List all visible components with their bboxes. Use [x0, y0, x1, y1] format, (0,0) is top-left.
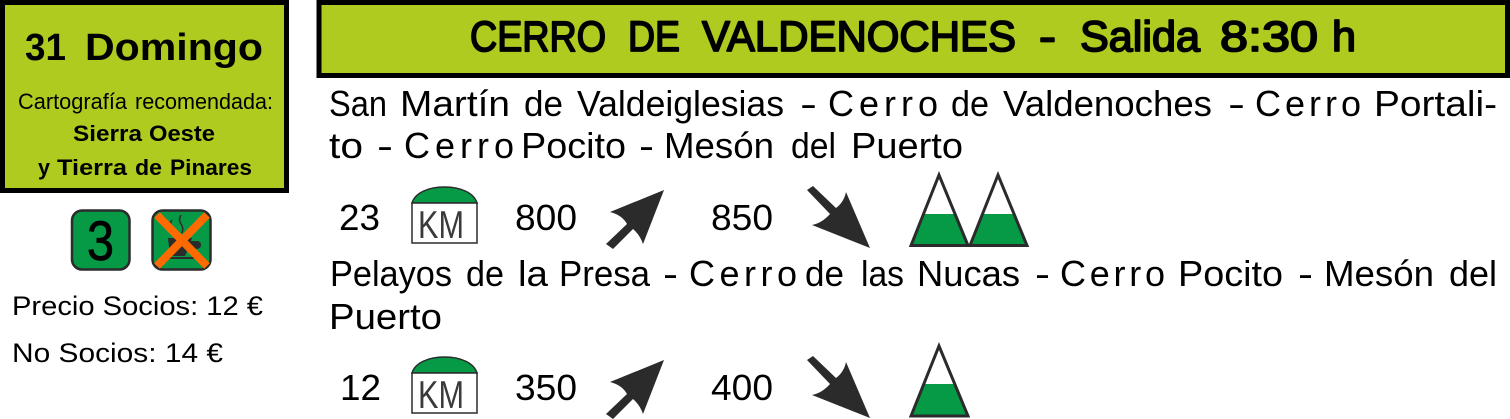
- text: descent: 850: [711, 197, 773, 238]
- text: route 2 line 1: Cerro: [1060, 253, 1165, 294]
- route 1 stats: [339, 175, 1027, 249]
- text: route 1 line 2: -: [377, 125, 393, 166]
- text: route 2 line 1: Pocito: [1178, 253, 1283, 294]
- icon: km marker: KM: [418, 204, 464, 247]
- text: map name line 2: Tierra: [57, 155, 128, 180]
- text: route 1 line 1: Cerro: [1255, 83, 1361, 124]
- text: map name line 2: Pinares: [170, 155, 252, 180]
- icon: descent arrow: [807, 356, 870, 418]
- panel: title banner: h: [1332, 13, 1356, 61]
- text: route 1 line 2: -: [639, 125, 654, 166]
- text: route 1 line 2: Puerto: [851, 125, 963, 166]
- text: route 2 line 1: -: [1298, 253, 1313, 294]
- text: map name line 2: y: [38, 155, 51, 180]
- text: route 1 line 1: Portali-: [1374, 83, 1497, 124]
- text: route 2 line 2: Puerto: [329, 296, 442, 337]
- text: member price: Precio Socios: 12 €: [12, 291, 263, 321]
- text: descent: 400: [711, 367, 773, 408]
- text: route 1 line 1: Martín: [400, 83, 510, 124]
- icon: km marker: [412, 187, 477, 247]
- text: route 1 line 1: Valdenoches: [1003, 83, 1212, 124]
- text: route 2 line 1: de: [466, 253, 504, 294]
- text: route 2 line 1: del: [1449, 253, 1497, 294]
- panel: title banner: -: [1039, 13, 1056, 61]
- text: route 1 line 2: Pocito: [521, 125, 626, 166]
- text: route 1 line 1: -: [800, 83, 817, 124]
- text: route 1 line 1: de: [951, 83, 989, 124]
- icon: difficulty 3: [72, 209, 130, 272]
- text: route 2 line 1: -: [663, 253, 678, 294]
- text: route 2 line 1: las: [861, 253, 904, 294]
- text: non-member price: No Socios: 14 €: [12, 338, 223, 368]
- heading: date: Domingo: [85, 27, 263, 69]
- panel: title banner: Salida: [1080, 13, 1200, 61]
- text: route 1 line 2: to: [329, 125, 363, 166]
- text: ascent: 350: [515, 367, 577, 408]
- icon: km marker: KM: [418, 374, 464, 417]
- text: route 2 line 1: Cerro: [689, 253, 797, 294]
- text: route 2 line 1: Nucas: [917, 253, 1020, 294]
- text: route 1 line 2: [329, 125, 963, 166]
- icon: no coffee: [152, 210, 210, 270]
- text: route 1 line 2: del: [791, 125, 836, 166]
- text: route 1 line 1: -: [1228, 83, 1245, 124]
- text: route 2 line 1: la: [518, 253, 549, 294]
- panel: date and map: [2, 2, 286, 190]
- panel: title banner: DE: [628, 13, 680, 61]
- text: route 2 line 1: Mesón: [1324, 253, 1434, 294]
- heading: date: 31: [25, 27, 66, 69]
- text: ascent: 800: [515, 197, 577, 238]
- text: route 1 line 1: de: [524, 83, 563, 124]
- text: map name line 1: [73, 121, 215, 146]
- text: route 2 line 1: Pelayos: [330, 253, 452, 294]
- text: route 1 line 1: Cerro: [828, 83, 938, 124]
- text: map name line 1: Sierra: [73, 121, 143, 146]
- icon: difficulty mountain: [911, 346, 968, 417]
- text: map name line 2: [38, 155, 252, 180]
- text: distance: 23: [339, 197, 380, 238]
- text: map name line 1: Oeste: [149, 121, 215, 146]
- panel: title banner: CERRO: [470, 13, 606, 61]
- text: map name line 2: de: [135, 155, 162, 180]
- route 2 stats: [340, 346, 968, 419]
- icon: ascent arrow: [606, 190, 664, 249]
- text: recommended cartography: [18, 89, 273, 114]
- icon: ascent arrow: [606, 360, 664, 419]
- icon: difficulty 3: 3: [87, 209, 114, 272]
- icon: difficulty mountains: [911, 175, 1027, 246]
- text: route 2 line 1: [330, 253, 1497, 294]
- icon: descent arrow: [807, 186, 870, 248]
- text: recommended cartography: recomendada:: [135, 89, 273, 114]
- text: route 1 line 2: Cerro: [404, 125, 514, 166]
- text: route 2 line 1: -: [1035, 253, 1050, 294]
- panel: title banner: [319, 2, 1508, 76]
- icon: km marker: [412, 357, 477, 417]
- text: route 2 line 1: de: [805, 253, 844, 294]
- text: route 1 line 2: Mesón: [664, 125, 774, 166]
- text: route 2 line 1: Presa: [559, 253, 651, 294]
- text: route 1 line 1: Valdeiglesias: [577, 83, 784, 124]
- panel: title banner: 8:30: [1220, 13, 1318, 61]
- text: recommended cartography: Cartografía: [18, 89, 128, 114]
- heading: date: [25, 27, 263, 69]
- text: route 1 line 1: San: [329, 83, 387, 124]
- panel: title banner: VALDENOCHES: [702, 13, 1016, 61]
- text: distance: 12: [340, 367, 381, 408]
- text: route 1 line 1: [329, 83, 1497, 124]
